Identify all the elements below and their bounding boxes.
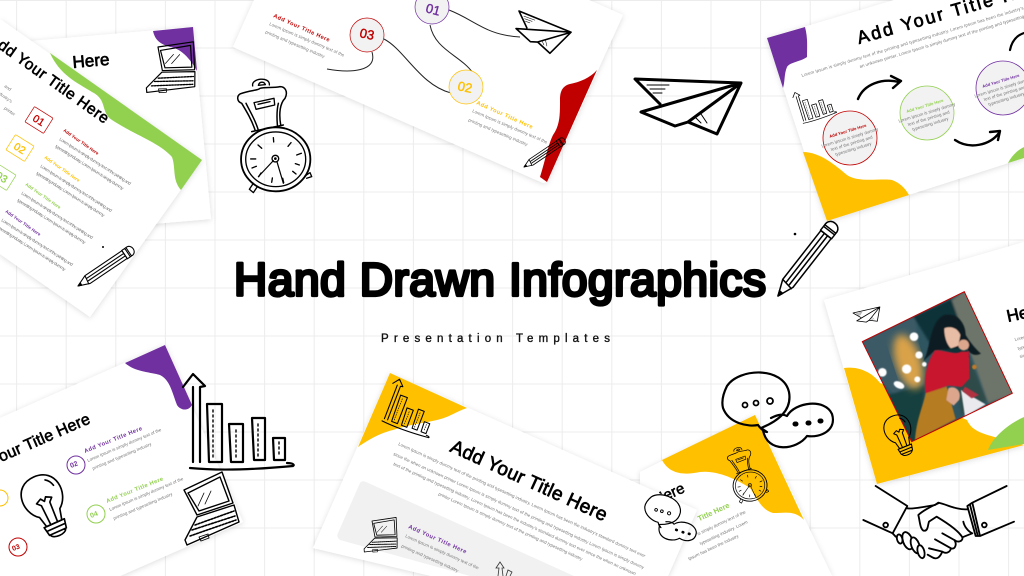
icon: small chart: [496, 562, 512, 576]
list item red: Add Your Title Here: [62, 128, 100, 156]
list item green: typesetting industry. Lorem Ipsum is simply dummy: [16, 198, 87, 245]
bubble red: Lorem Ipsum is simply dummy: [821, 126, 880, 149]
text block yellow: printing and typesetting industry: [468, 117, 529, 147]
icon: pencil next to title: [772, 219, 841, 300]
icon: chart: [792, 82, 837, 124]
tag 02: [6, 135, 34, 161]
icon: large paper plane: [635, 79, 741, 134]
bubble purple: Add Your Title Here: [982, 73, 1021, 89]
intro text: printer Lorem Ipsum is simply dummy text of the printing and typesetting industry: [438, 491, 584, 562]
icon: handshake: [863, 486, 1014, 559]
list item red: typesetting industry. Lorem Ipsum is simply dummy: [54, 144, 125, 191]
item 03: [9, 538, 27, 556]
icon: alarm clock: [238, 79, 312, 193]
connector lines: [327, 10, 520, 93]
tag 02: 02: [11, 141, 28, 157]
intro text: text of the printing and typesetting industry. Lorem Ipsum has been the industry's standard dummy text ever since the when an unknown: [393, 461, 637, 576]
slide heading: Add Your Title Here: [447, 436, 610, 526]
panel: top-left front slide: [0, 19, 202, 317]
purple blob: [767, 27, 807, 88]
yellow blob: [803, 152, 909, 221]
panel: top-left back slide: [30, 27, 211, 233]
list item yellow: Add Your Title Here: [43, 155, 81, 183]
text block red: Lorem Ipsum is simply dummy text of the: [269, 21, 346, 58]
item 02: 02: [69, 461, 79, 470]
body text: Ipsum has been the industry: [687, 533, 740, 561]
dot: [102, 246, 104, 248]
body text: is simply dummy text of the: [696, 509, 747, 536]
item 04: Lorem Ipsum is simply dummy text of the: [108, 476, 185, 512]
bubble green: Lorem Ipsum is simply dummy: [898, 101, 957, 124]
body text: typesetting industry. Lorem: [699, 519, 749, 546]
item 04: Add Your Title Here: [106, 476, 165, 505]
bubble green: text of the printing and: [907, 109, 951, 127]
grey panel: [337, 481, 574, 576]
icon: light bulb: [880, 411, 920, 460]
tag 01: [25, 107, 53, 133]
intro text: printer: [3, 106, 17, 117]
step 01: 01: [424, 0, 442, 19]
intro text: and: [3, 84, 13, 92]
green heading: Title Here: [696, 501, 731, 523]
yellow blob: [662, 415, 804, 520]
icon: paper plane: [509, 11, 572, 58]
icon: paper plane: [853, 306, 883, 327]
arrows: [858, 33, 1024, 145]
photo: [862, 290, 1015, 445]
green blob: [988, 417, 1024, 450]
item 03: 03: [11, 544, 21, 553]
list item yellow: typesetting industry. Lorem Ipsum is simply dummy: [35, 171, 106, 218]
panel: bottom-left slide: [0, 345, 243, 576]
icon: laptop: [144, 32, 207, 105]
bubble red: typesetting industry: [835, 141, 873, 157]
bubble green: Add Your Title Here: [906, 98, 945, 114]
icon: laptop: [363, 511, 406, 561]
purple blob: [153, 27, 197, 71]
list item red: Lorem Ipsum is simply dummy text of the printing and: [58, 137, 132, 186]
text block yellow: Lorem Ipsum is simply dummy text of the: [472, 108, 549, 145]
green blob: [50, 53, 202, 190]
item 04: 04: [89, 511, 99, 520]
list item purple: Lorem Ipsum is simply dummy text of the printing and: [0, 218, 74, 267]
item 04: [87, 476, 185, 523]
purple blob: [125, 345, 192, 410]
panel: right slide with photo: [824, 242, 1024, 484]
panel: top-right slide: [767, 0, 1024, 221]
list item green: Lorem Ipsum is simply dummy text of the printing and: [20, 191, 94, 240]
item 02: Lorem Ipsum is simply dummy text of the: [86, 427, 163, 463]
text block yellow: Add Your Title Here: [475, 100, 533, 131]
icon: large chat bubbles: [722, 372, 833, 447]
heading: Here: [651, 480, 687, 509]
icon: pencil: [75, 245, 136, 290]
tag 01: 01: [30, 113, 47, 129]
icon: pencil: [522, 136, 567, 170]
list item purple: Add Your Title Here: [4, 209, 42, 237]
icon: light bulb: [15, 469, 78, 544]
item 02: Add Your Title Here: [84, 426, 144, 455]
step 03: [350, 18, 384, 52]
body text: [1014, 334, 1024, 359]
heading: Here: Here: [72, 50, 110, 72]
icon: laptop: [184, 472, 239, 545]
intro text: [0, 84, 17, 117]
body text: [687, 509, 749, 561]
subtitle: Presentation Templates: [381, 333, 610, 345]
item 01 partial: [0, 490, 8, 506]
icon: chat bubbles: [636, 489, 706, 549]
intro text: Lorem Ipsum is simply dummy text of the printing and typesetting industry. Lorem Ipsum has been the industry's: [801, 5, 1024, 78]
bubble green: typesetting industry: [912, 116, 950, 132]
panel: top centre slide: [233, 0, 623, 183]
step 03: 03: [358, 25, 376, 43]
text block purple: Add Your Title Here: [407, 524, 468, 556]
text block purple: printing and typesetting industry: [401, 543, 460, 573]
item 02: printing and typesetting industry: [91, 441, 153, 471]
photo red frame: [862, 292, 1012, 442]
bubble red: [819, 111, 883, 165]
text block red: printing and typesetting industry: [265, 29, 326, 59]
bubble red: text of the printing and: [830, 134, 874, 152]
step 01: [415, 0, 449, 24]
step 02: [449, 70, 483, 104]
bubble purple: [972, 61, 1024, 115]
icon: chart: [379, 378, 445, 439]
list item yellow: Lorem Ipsum is simply dummy text of the printing and: [39, 164, 113, 213]
yellow blob: [358, 373, 467, 447]
tag 03: [0, 164, 16, 190]
intro text: an unknown printer. Lorem Ipsum is simply dummy text of the printing and typesetting: [859, 14, 1024, 69]
panel: bottom centre slide: [313, 373, 706, 576]
green blob: [1008, 147, 1024, 163]
text block red: Add Your Title Here: [272, 13, 330, 44]
step 02: 02: [456, 78, 474, 96]
red blob: [540, 70, 597, 182]
bubble red: Add Your Title Here: [829, 123, 868, 139]
icon: clock: [726, 444, 770, 504]
panel: slide behind chat bubbles: [640, 415, 832, 576]
intro text: since the when an unknown printer Lorem Ipsum is simply dummy text of the printing and typesetting industry Lorem Ipsum is simply dummy: [393, 451, 646, 570]
title: Hand Drawn Infographics: [234, 254, 766, 306]
icon: bar chart: [183, 374, 294, 469]
text block purple: Lorem Ipsum is simply dummy text of the: [405, 533, 480, 571]
item 02: [67, 426, 163, 474]
bubble green: [896, 86, 960, 140]
yellow blob: [844, 368, 1024, 484]
list item green: Add Your Title Here: [24, 182, 62, 210]
dot: [794, 233, 796, 235]
item 04: printing and typesetting industry: [112, 491, 174, 521]
intro text: Lorem Ipsum is simply dummy text of the printing and typesetting industry. Lorem Ipsum has been the industry's standard dummy text ever: [398, 441, 647, 559]
